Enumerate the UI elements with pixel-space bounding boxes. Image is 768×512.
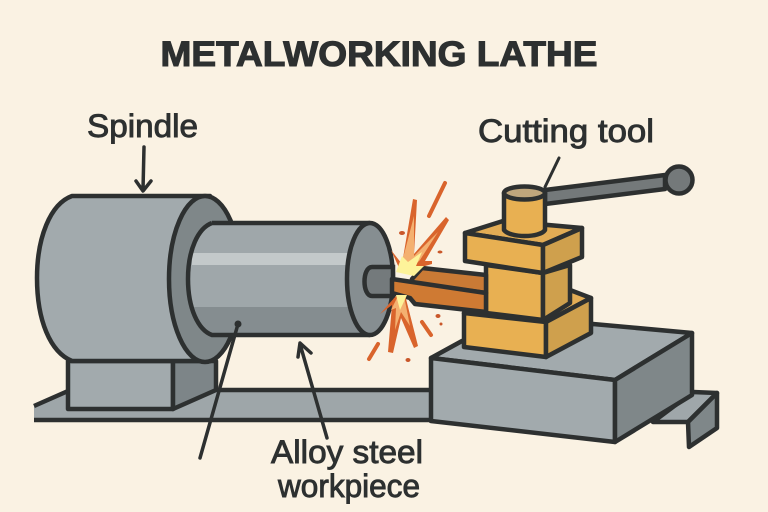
sparks bbox=[369, 183, 449, 362]
alloy steel workpiece bbox=[188, 223, 393, 335]
pointer: cutting tool bbox=[545, 158, 559, 187]
top block bbox=[465, 221, 582, 273]
label: cutting tool: Cutting tool bbox=[478, 113, 654, 149]
label: alloy steel workpiece: Alloy steel bbox=[271, 434, 423, 470]
label: alloy steel workpiece: workpiece bbox=[277, 468, 420, 504]
handle bbox=[545, 166, 692, 204]
label: spindle: Spindle bbox=[87, 108, 198, 144]
label arrow: spindle bbox=[136, 147, 151, 191]
lathe bed rail bbox=[34, 390, 432, 420]
handle hub bbox=[504, 186, 545, 236]
tool post bbox=[464, 166, 692, 357]
spindle pedestal bbox=[68, 361, 216, 409]
title: METALWORKING LATHE bbox=[160, 35, 598, 74]
pointer: workpiece arrow bbox=[298, 343, 327, 438]
spindle housing bbox=[37, 196, 241, 362]
middle column bbox=[486, 265, 570, 320]
lower block bbox=[464, 290, 591, 357]
pointer: workpiece dot line bbox=[200, 320, 242, 458]
cutting tool bbox=[392, 268, 486, 312]
carriage table bbox=[431, 324, 717, 447]
